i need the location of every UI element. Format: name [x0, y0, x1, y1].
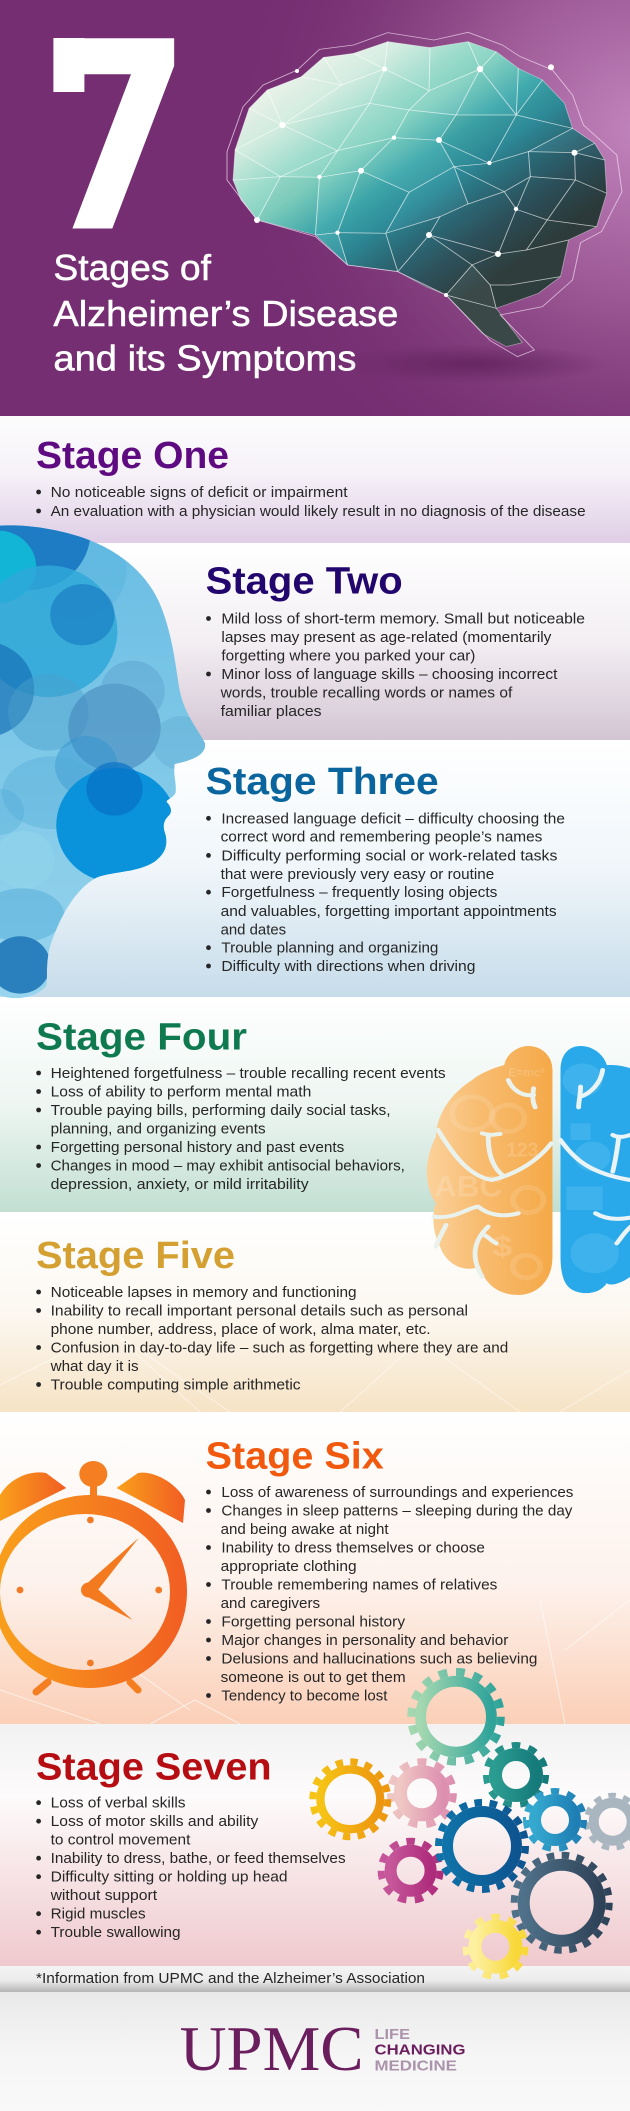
bullet list: stage three: that were previously very easy or routine	[221, 866, 494, 883]
brain shadow	[339, 344, 609, 384]
logo tagline: MEDICINE	[374, 2058, 457, 2074]
icon: head silhouette with circles	[0, 525, 206, 998]
bullet list: stage two: lapses may present as age-related (momentarily	[221, 629, 552, 646]
gear: yellow	[465, 1917, 525, 1977]
bullet list: stage two: words, trouble recalling words or names of	[220, 684, 513, 701]
bullet list: stage six	[206, 1484, 573, 1704]
bullet list: stage one: An evaluation with a physician would likely result in no diagnosis of the disease	[51, 503, 586, 520]
bullet list: stage five: Inability to recall important personal details such as personal	[51, 1302, 468, 1320]
icon: gears	[313, 1672, 630, 1977]
bullet list: stage four: planning, and organizing events	[51, 1120, 266, 1138]
bullet list: stage four	[36, 1065, 446, 1193]
icon: alarm clock	[0, 1461, 187, 1692]
bullet list: stage five: Trouble computing simple arithmetic	[51, 1376, 301, 1394]
gear: gray	[586, 1795, 630, 1848]
bullet list: stage three: Difficulty performing social or work-related tasks	[221, 847, 557, 864]
bullet list: stage six: Delusions and hallucinations such as believing	[221, 1650, 537, 1668]
bullet list: stage four: depression, anxiety, or mild irritability	[51, 1176, 309, 1193]
header panel	[0, 0, 630, 416]
bullet list: stage six: appropriate clothing	[221, 1558, 357, 1575]
bullet list: stage five: Confusion in day-to-day life – such as forgetting where they are and	[51, 1340, 508, 1356]
panel: stage five	[0, 1212, 630, 1412]
bullet list: stage six: and being awake at night	[221, 1521, 389, 1538]
bullet list: stage three: Trouble planning and organizing	[221, 940, 438, 957]
bullet list: stage two: forgetting where you parked your car)	[221, 648, 475, 665]
faint symbols	[434, 1066, 545, 1264]
bullet list: stage six: Forgetting personal history	[221, 1614, 406, 1630]
panel: stage two	[0, 543, 630, 740]
bells	[0, 1472, 185, 1523]
knob	[79, 1461, 107, 1497]
gear: orange-yellow	[313, 1762, 388, 1837]
title	[53, 247, 398, 379]
heading: stage four: Stage Four	[36, 1016, 247, 1058]
bullet list: stage six: someone is out to get them	[221, 1669, 406, 1686]
bullet list: stage five: Noticeable lapses in memory and functioning	[51, 1284, 357, 1301]
hour dots	[17, 1517, 162, 1666]
bullet list: stage six: Major changes in personality and behavior	[221, 1632, 508, 1649]
gear: green	[411, 1672, 501, 1761]
bullet list: stage seven: without support	[50, 1887, 158, 1904]
bullet list: stage two: Mild loss of short-term memory. Small but noticeable	[221, 610, 585, 628]
bullet list: stage six: Changes in sleep patterns – sleeping during the day	[221, 1502, 573, 1520]
footnote band	[0, 1966, 630, 1992]
faint symbols: E=mc²	[508, 1066, 545, 1079]
title: Alzheimer’s Disease	[53, 293, 398, 334]
bullet list: stage six: Loss of awareness of surroundings and experiences	[221, 1484, 573, 1501]
bullet list: stage seven: Difficulty sitting or holding up head	[51, 1869, 288, 1886]
brain network nodes	[254, 64, 578, 297]
logo tagline: CHANGING	[374, 2042, 466, 2058]
bullet list: stage six: Tendency to become lost	[221, 1688, 388, 1704]
heading: stage two: Stage Two	[206, 561, 403, 603]
faint symbols: 123	[506, 1139, 538, 1161]
bullet list: stage four: Loss of ability to perform mental math	[51, 1084, 311, 1100]
heading: stage three: Stage Three	[206, 761, 439, 803]
bullet list: stage six: and caregivers	[221, 1595, 320, 1612]
bullet list: stage seven: Loss of verbal skills	[51, 1795, 186, 1812]
bullet list: stage three	[206, 810, 565, 975]
clock hands	[81, 1538, 139, 1620]
bullet list: stage four: Trouble paying bills, performing daily social tasks,	[51, 1102, 391, 1119]
gear: magenta	[381, 1841, 440, 1900]
panel: stage four	[0, 997, 630, 1212]
panel: stage one	[0, 416, 630, 543]
bullet list: stage six: Inability to dress themselves or choose	[221, 1540, 485, 1556]
gear: pink	[390, 1762, 453, 1825]
footnote text: *Information from UPMC and the Alzheimer’s Association	[36, 1970, 425, 1987]
bullet list: stage seven: Rigid muscles	[51, 1906, 146, 1923]
title: Stages of	[53, 247, 212, 288]
faint symbols: ABC	[434, 1170, 502, 1204]
panel: stage seven	[0, 1724, 630, 1966]
icon: low-poly brain	[227, 32, 622, 357]
faint symbols: $	[492, 1230, 512, 1264]
bullet list: stage one: No noticeable signs of deficit or impairment	[51, 484, 348, 501]
bullet list: stage seven: to control movement	[51, 1832, 191, 1849]
bullet list: stage seven: Inability to dress, bathe, or feed themselves	[51, 1850, 346, 1867]
bullet list: stage five: what day it is	[50, 1358, 139, 1375]
icon: left-right brain	[427, 1046, 630, 1295]
gear: light blue	[526, 1791, 584, 1849]
gear: navy	[438, 1802, 526, 1890]
bullet list: stage seven: Loss of motor skills and ability	[51, 1813, 259, 1830]
bullet list: stage four: Forgetting personal history and past events	[51, 1139, 344, 1156]
bullet list: stage five	[36, 1284, 508, 1394]
bullet list: stage four: Heightened forgetfulness – trouble recalling recent events	[51, 1065, 446, 1082]
bullet list: stage seven	[36, 1795, 346, 1941]
bullet list: stage two: familiar places	[221, 703, 322, 720]
heading: stage seven: Stage Seven	[36, 1746, 272, 1788]
footer panel with logo	[0, 1992, 630, 2111]
title: and its Symptoms	[53, 338, 356, 379]
right hemisphere	[561, 1046, 630, 1293]
panel: stage three	[0, 740, 630, 997]
bullet list: stage one	[36, 484, 586, 520]
feet	[36, 1682, 138, 1692]
bullet list: stage three: correct word and remembering people’s names	[221, 829, 542, 846]
bullet list: stage three: and dates	[221, 921, 286, 938]
panel: stage six	[0, 1412, 630, 1724]
heading: stage one: Stage One	[36, 435, 229, 477]
gear: slate	[514, 1855, 609, 1950]
bullet list: stage three: and valuables, forgetting important appointments	[221, 903, 557, 920]
logo tagline: LIFE	[374, 2026, 410, 2043]
gear: teal	[486, 1745, 546, 1805]
bullet list: stage three: Increased language deficit – difficulty choosing the	[221, 810, 565, 827]
bullet list: stage three: Difficulty with directions when driving	[221, 958, 475, 975]
logo: UPMC: UPMC	[180, 2014, 364, 2084]
bullet list: stage six: Trouble remembering names of relatives	[221, 1576, 497, 1594]
bullet list: stage two: Minor loss of language skills – choosing incorrect	[221, 666, 558, 683]
clock ring	[0, 1495, 187, 1688]
heading: stage six: Stage Six	[206, 1435, 384, 1477]
bullet list: stage five: phone number, address, place of work, alma mater, etc.	[51, 1321, 431, 1338]
bullet list: stage three: Forgetfulness – frequently losing objects	[221, 884, 497, 901]
bullet list: stage four: Changes in mood – may exhibit antisocial behaviors,	[51, 1158, 405, 1174]
bullet list: stage seven: Trouble swallowing	[51, 1924, 181, 1941]
logo tagline	[374, 2026, 466, 2074]
left hemisphere	[427, 1046, 552, 1295]
bullet list: stage two	[206, 610, 585, 720]
heading: stage five: Stage Five	[36, 1235, 235, 1277]
